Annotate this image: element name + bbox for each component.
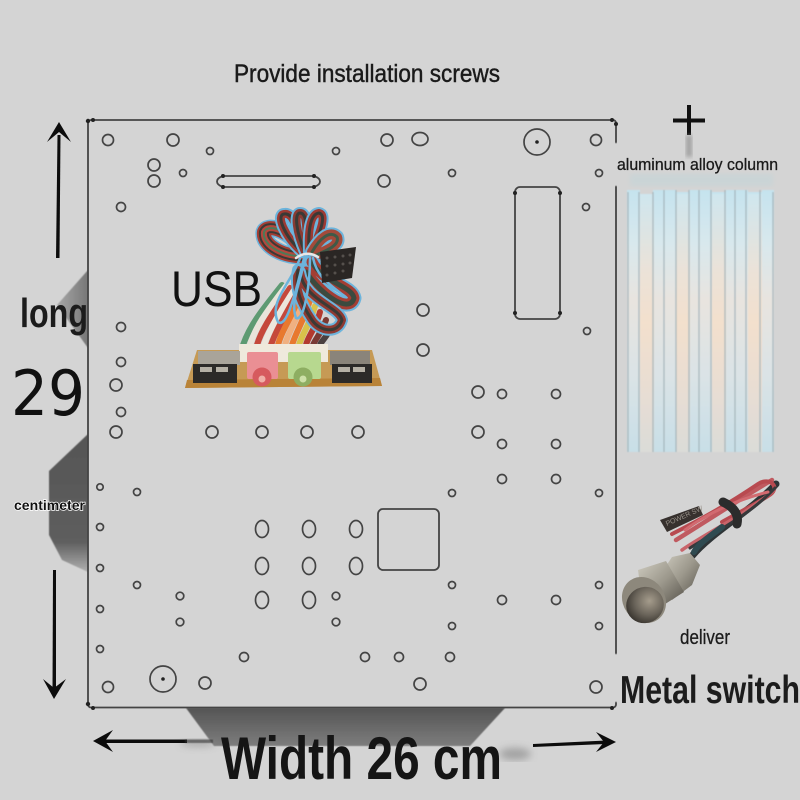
arrow: down: [43, 570, 66, 699]
header connector: [320, 247, 356, 283]
arrow: right: [533, 732, 616, 752]
panel: board outline: [86, 118, 618, 710]
shadow smudge near width label: [180, 740, 531, 760]
metal switch: [613, 480, 776, 632]
label: 29: 29: [11, 357, 85, 430]
standoff bottom left: [150, 666, 176, 692]
switch body: [662, 553, 700, 600]
shadow: left lower wedge: [49, 434, 88, 572]
shadow: bottom wedge: [186, 708, 505, 746]
arrow: left: [93, 730, 213, 752]
icon: plus sign: [673, 105, 705, 135]
rainbow ribbon: [243, 285, 330, 345]
title: Provide installation screws: [234, 60, 500, 88]
plug: [660, 506, 703, 532]
label: USB: USB: [171, 261, 262, 317]
standoff top right: [524, 129, 550, 155]
cutout: vertical rectangle: [513, 187, 562, 319]
left large loop: [264, 228, 306, 256]
label: centimeter: centimeter: [14, 497, 86, 513]
USB audio panel: [185, 344, 382, 388]
metal switch: POWER SW: [665, 505, 704, 528]
lower right loops: [297, 262, 354, 330]
cutout: horizontal slot: [217, 174, 320, 189]
mounting holes: [96, 132, 602, 693]
cable tie: [296, 254, 318, 258]
outline gaps on right edge: [612, 143, 620, 702]
cutout: square: [378, 509, 439, 570]
label: long: long: [20, 290, 88, 336]
aluminum top glow: [630, 174, 773, 186]
label: deliver: deliver: [680, 627, 730, 649]
top petals: [281, 213, 337, 256]
blue centre strands: [276, 258, 344, 323]
label: width: Width 26 cm: [221, 725, 502, 792]
label: aluminum alloy column: aluminum alloy column: [617, 155, 778, 174]
arrow: up: [47, 122, 71, 258]
aluminum column: [627, 188, 774, 452]
switch wires: [672, 480, 776, 556]
shadow: left upper wedge: [57, 270, 88, 348]
USB front panel cable: [243, 213, 354, 345]
plus shadow: [686, 135, 692, 157]
